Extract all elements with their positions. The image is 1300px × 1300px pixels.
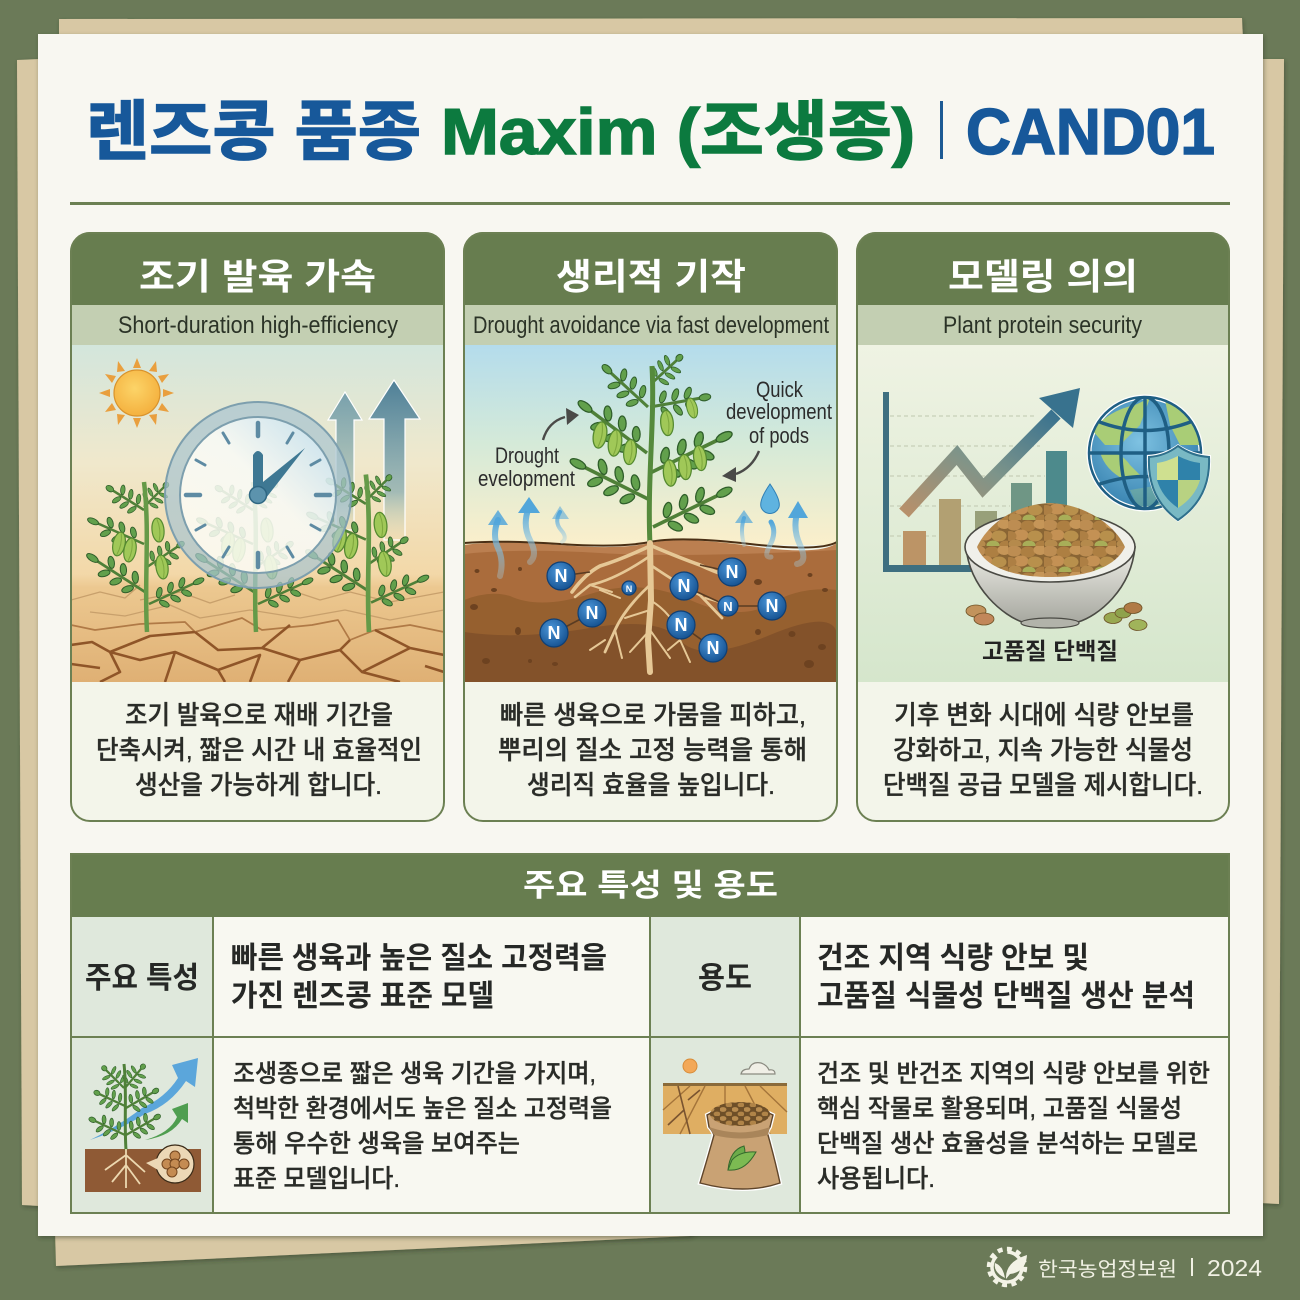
uses description	[817, 1060, 1210, 1193]
panel heading: 모델링 의의	[948, 256, 1138, 297]
plant	[570, 354, 733, 542]
panel body text: 단축시켜, 짧은 시간 내 효율적인	[96, 735, 422, 765]
trend arrow	[904, 388, 1080, 513]
cracked soil	[71, 585, 444, 682]
footer: organisation and year: 2024	[1207, 1255, 1262, 1281]
panel header	[463, 232, 838, 305]
trait summary: 빠른 생육과 높은 질소 고정력을	[231, 942, 607, 975]
label cell backgrounds	[71, 917, 800, 1213]
nitrogen nodes: N	[766, 596, 778, 616]
trait description: 조생종으로 짧은 생육 기간을 가지며,	[233, 1060, 596, 1088]
panel subheading: Short-duration high-efficiency	[118, 312, 398, 339]
plant right	[305, 474, 430, 632]
water drop	[761, 484, 779, 513]
footer: organisation and year: 한국농업정보원	[1038, 1258, 1177, 1281]
panel body text: 생산을 가능하게 합니다.	[135, 770, 382, 800]
panel subheading	[857, 305, 1229, 345]
panel: physiological mechanism	[463, 232, 838, 822]
illustration: plant, roots and nitrogen	[464, 345, 837, 682]
nitrogen nodes	[540, 558, 786, 662]
uses summary	[817, 942, 1195, 1013]
clock	[165, 402, 351, 588]
panel body text: 단백질 공급 모델을 제시합니다.	[883, 770, 1203, 800]
panel body text: 조기 발육으로 재배 기간을	[125, 700, 393, 730]
roots	[572, 543, 730, 672]
illustration: clock and plants on cracked soil	[71, 345, 444, 682]
panel body text: 뿌리의 질소 고정 능력을 통해	[498, 735, 807, 765]
icon: sack on dry field	[663, 1059, 787, 1189]
label: quick development of pods	[726, 377, 832, 448]
table: key traits and uses	[70, 853, 1230, 1213]
icon: plant with growth arrows	[84, 1057, 201, 1192]
label: drought development: Drought	[495, 443, 559, 468]
footer: organisation and year	[986, 1246, 1262, 1288]
trait description: 척박한 환경에서도 높은 질소 고정력을	[233, 1095, 612, 1123]
illustration: chart, globe and lentils	[857, 345, 1229, 682]
panel: modelling significance	[856, 232, 1230, 822]
row label: uses: 용도	[698, 962, 752, 995]
bar chart	[883, 392, 1067, 572]
panel header	[70, 232, 445, 305]
loose lentils	[966, 602, 1147, 630]
nitrogen nodes: N	[706, 638, 720, 658]
panel subheading: Plant protein security	[943, 312, 1142, 339]
uses description: 건조 및 반건조 지역의 식량 안보를 위한	[817, 1060, 1210, 1088]
nitrogen nodes: N	[586, 603, 598, 623]
uses description: 핵심 작물로 활용되며, 고품질 식물성	[817, 1095, 1182, 1123]
globe and shield	[1089, 397, 1211, 522]
label: quick development of pods: of pods	[749, 423, 809, 448]
label: high quality protein: 고품질 단백질	[982, 638, 1118, 664]
panel header	[856, 232, 1230, 305]
panel subheading: Drought avoidance via fast development	[473, 312, 829, 339]
uses description: 사용됩니다.	[817, 1165, 935, 1193]
nitrogen nodes: N	[723, 599, 733, 614]
icon: gear with leaf	[986, 1246, 1028, 1288]
table header	[70, 853, 1230, 917]
nitrogen nodes: N	[554, 566, 568, 586]
label: quick development of pods: Quick	[756, 377, 804, 402]
panel body text	[883, 700, 1203, 800]
nitrogen nodes: N	[674, 615, 688, 635]
trait summary: 가진 렌즈콩 표준 모델	[231, 980, 494, 1013]
plant left	[86, 482, 204, 632]
title: 렌즈콩 품종	[86, 95, 421, 168]
title	[86, 95, 1215, 168]
trait description	[233, 1060, 612, 1193]
nitrogen nodes: N	[678, 576, 690, 596]
label: quick development of pods: development	[726, 399, 832, 424]
soil	[464, 539, 837, 682]
uses summary: 고품질 식물성 단백질 생산 분석	[817, 980, 1195, 1013]
title: Maxim (조생종)	[441, 95, 915, 168]
label: drought development	[478, 443, 575, 491]
panel body text: 생리직 효율을 높입니다.	[527, 770, 775, 800]
growth arrows	[328, 380, 420, 540]
panel heading: 조기 발육 가속	[139, 256, 376, 297]
nitrogen nodes: N	[548, 623, 560, 643]
panel body text	[96, 700, 422, 800]
trait summary	[231, 942, 607, 1013]
trait description: 통해 우수한 생육을 보여주는	[233, 1130, 520, 1158]
table grid	[70, 854, 1230, 1213]
panel heading: 생리적 기작	[556, 256, 746, 297]
plant center	[195, 482, 314, 632]
arrow: toward plant right	[722, 451, 759, 482]
table header: 주요 특성 및 용도	[523, 868, 778, 903]
nitrogen nodes: N	[726, 562, 738, 582]
trait description: 표준 모델입니다.	[233, 1165, 400, 1193]
title: CAND01	[966, 95, 1215, 168]
panel body text	[498, 700, 807, 800]
panel subheading	[71, 305, 444, 345]
water vapor arrows	[495, 507, 803, 576]
arrow: toward plant left	[543, 408, 579, 440]
nitrogen nodes: N	[626, 584, 632, 594]
bowl of lentils	[965, 503, 1135, 628]
row label: traits: 주요 특성	[85, 962, 199, 995]
title divider	[70, 202, 1230, 205]
panel: early development	[70, 232, 445, 822]
label: drought development: evelopment	[478, 466, 575, 491]
uses summary: 건조 지역 식량 안보 및	[817, 942, 1089, 975]
panel body text: 기후 변화 시대에 식량 안보를	[894, 700, 1194, 730]
sun	[99, 358, 174, 428]
panel subheading	[464, 305, 837, 345]
panel body text: 강화하고, 지속 가능한 식물성	[893, 735, 1193, 765]
panel body text: 빠른 생육으로 가뭄을 피하고,	[500, 700, 806, 730]
uses description: 단백질 생산 효율성을 분석하는 모델로	[817, 1130, 1198, 1158]
